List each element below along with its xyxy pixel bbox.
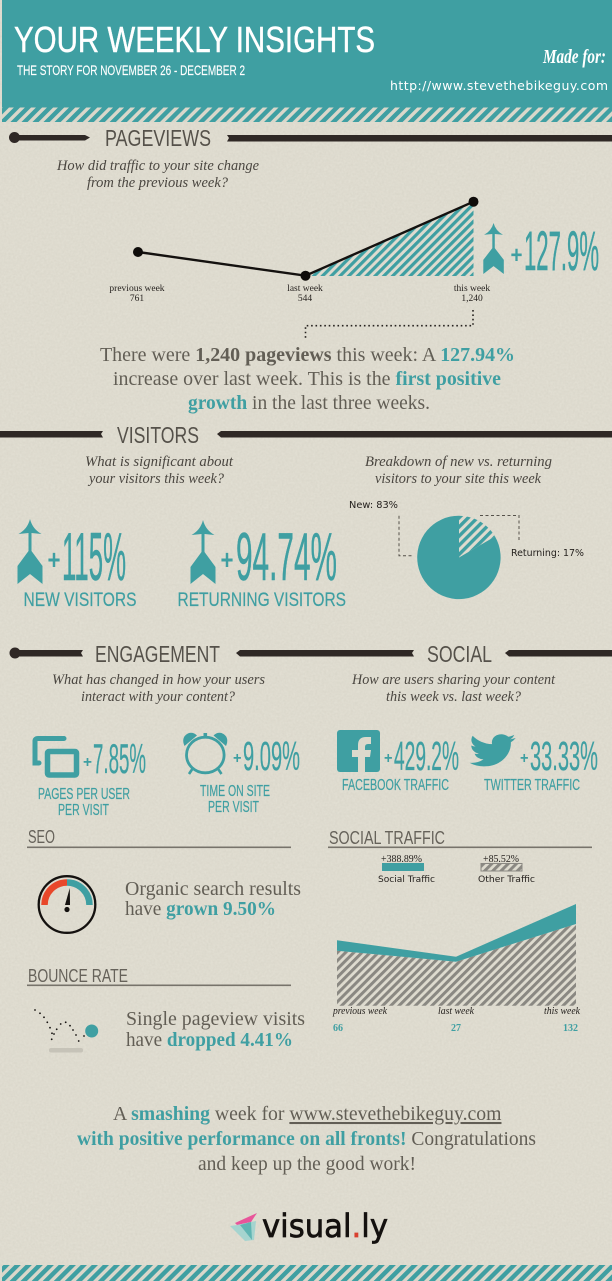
pageviews summary: There were 1,240 pageviews this week: A 127.94% [100,344,515,366]
visitors questions: What is significant about [85,454,234,470]
area chart: social traffic: this week [544,1006,581,1017]
stat: time on site: + [233,750,242,767]
line chart: pageviews: previous week [109,284,165,294]
sub-heading: seo: SEO [28,827,55,847]
pageviews question: from the previous week? [87,175,229,191]
text: 115% [62,519,126,595]
area chart: social traffic: 66 [333,1023,343,1034]
footer stripes [2,1265,612,1281]
stat: returning visitors: + [220,544,234,575]
pie chart: new vs returning: Returning: 17% [511,548,584,559]
visitors questions: Breakdown of new vs. returning [365,454,552,470]
visitors questions [85,454,552,487]
stat: time on site [200,733,300,816]
legend: social traffic: Social Traffic [378,875,435,885]
stat: +127.9%: + [510,242,522,269]
stat: pages per user per visit: PER VISIT [58,802,109,819]
icon: alarm clock [183,733,227,774]
header banner [2,0,612,122]
stat: facebook traffic: + [384,750,392,767]
icon: facebook [337,730,380,772]
line chart: pageviews: 544 [298,294,312,304]
visitors questions: visitors to your site this week [375,471,542,487]
stat: facebook traffic [342,733,459,794]
closing message: and keep up the good work! [198,1153,416,1175]
section heading: pageviews [9,125,612,151]
bounce rate text [126,1008,305,1051]
line chart: pageviews [109,197,490,304]
logo: visual.ly: visual.ly [262,1207,388,1245]
stat: twitter traffic: + [520,750,528,767]
visitors questions: your visitors this week? [87,471,225,487]
social question [351,672,556,705]
area chart: social traffic: 27 [451,1023,461,1034]
bounce rate text: have dropped 4.41% [126,1029,293,1051]
section heading: engagement: ENGAGEMENT [95,641,220,667]
legend: social traffic [378,854,435,885]
stat: pages per user per visit [38,735,146,819]
line chart: pageviews: 761 [130,294,144,304]
engagement question [52,672,265,705]
pageviews summary: growth in the last three weeks. [188,392,430,414]
area chart: social traffic: 132 [563,1023,578,1034]
icon: up arrow returning visitors [190,520,216,584]
section heading: social: SOCIAL [427,641,492,667]
stat: new visitors [24,519,136,611]
closing message [77,1103,536,1175]
text: 7.85% [93,735,146,782]
stat: returning visitors: RETURNING VISITORS [178,590,346,611]
icon: pages [35,738,76,775]
bounce rate text: Single pageview visits [126,1008,305,1030]
icon: gauge [39,876,95,933]
stat: returning visitors [178,519,346,611]
icon: twitter bird [470,734,516,766]
section heading: pageviews: PAGEVIEWS [105,125,211,151]
text: 9.09% [243,733,300,779]
stat: twitter traffic [484,733,598,794]
pageviews question: How did traffic to your site change [56,158,260,174]
legend: other traffic: Other Traffic [478,875,535,885]
pie chart: new vs returning: New: 83% [349,500,398,511]
closing message: A smashing week for www.stevethebikeguy.com [113,1103,502,1125]
seo text [125,878,301,920]
legend: social traffic: +388.89% [381,854,422,865]
seo text: have grown 9.50% [125,898,276,920]
pageviews summary [100,344,515,414]
seo text: Organic search results [125,878,301,900]
dotted connector [306,310,473,338]
line chart: pageviews: 1,240 [461,294,483,304]
stat: new visitors: + [48,544,60,575]
sub-heading: bounce rate: BOUNCE RATE [28,966,128,986]
pie chart: new vs returning [349,500,584,599]
stat: time on site: TIME ON SITE [200,783,270,800]
line chart: pageviews: last week [287,284,323,294]
site url: http://www.stevethebikeguy.com [390,78,608,93]
sub-heading: social traffic: SOCIAL TRAFFIC [329,828,445,848]
line chart: pageviews: this week [454,284,490,294]
stat: pages per user per visit: PAGES PER USER [38,786,130,803]
icon: bouncing ball [34,1009,98,1052]
section heading: visitors [0,422,612,448]
section heading: engagement [10,641,414,667]
icon: up arrow pageviews [483,223,504,274]
text: 94.74% [236,519,337,595]
pageviews question [56,158,260,191]
subtitle: THE STORY FOR NOVEMBER 26 - DECEMBER 2 [17,62,245,78]
area chart: social traffic [332,904,581,1034]
social question: this week vs. last week? [386,689,522,705]
section heading: visitors: VISITORS [117,422,199,448]
icon: up arrow new visitors [18,519,42,584]
social question: How are users sharing your content [351,672,556,688]
title: YOUR WEEKLY INSIGHTS [14,19,375,60]
closing message: with positive performance on all fronts! Congratulations [77,1128,536,1150]
section heading: social [427,641,612,667]
engagement question: interact with your content? [81,689,236,705]
text: 429.2% [394,733,459,779]
stat: new visitors: NEW VISITORS [24,590,136,611]
engagement question: What has changed in how your users [52,672,265,688]
pageviews summary: increase over last week. This is the first positive [113,368,501,390]
stat: pages per user per visit: + [83,754,92,771]
stat: time on site: PER VISIT [208,799,259,816]
legend: other traffic [478,854,535,885]
area chart: social traffic: last week [438,1006,475,1017]
stat: facebook traffic: FACEBOOK TRAFFIC [342,777,449,794]
legend: other traffic: +85.52% [483,854,519,865]
area chart: social traffic: previous week [332,1006,388,1017]
